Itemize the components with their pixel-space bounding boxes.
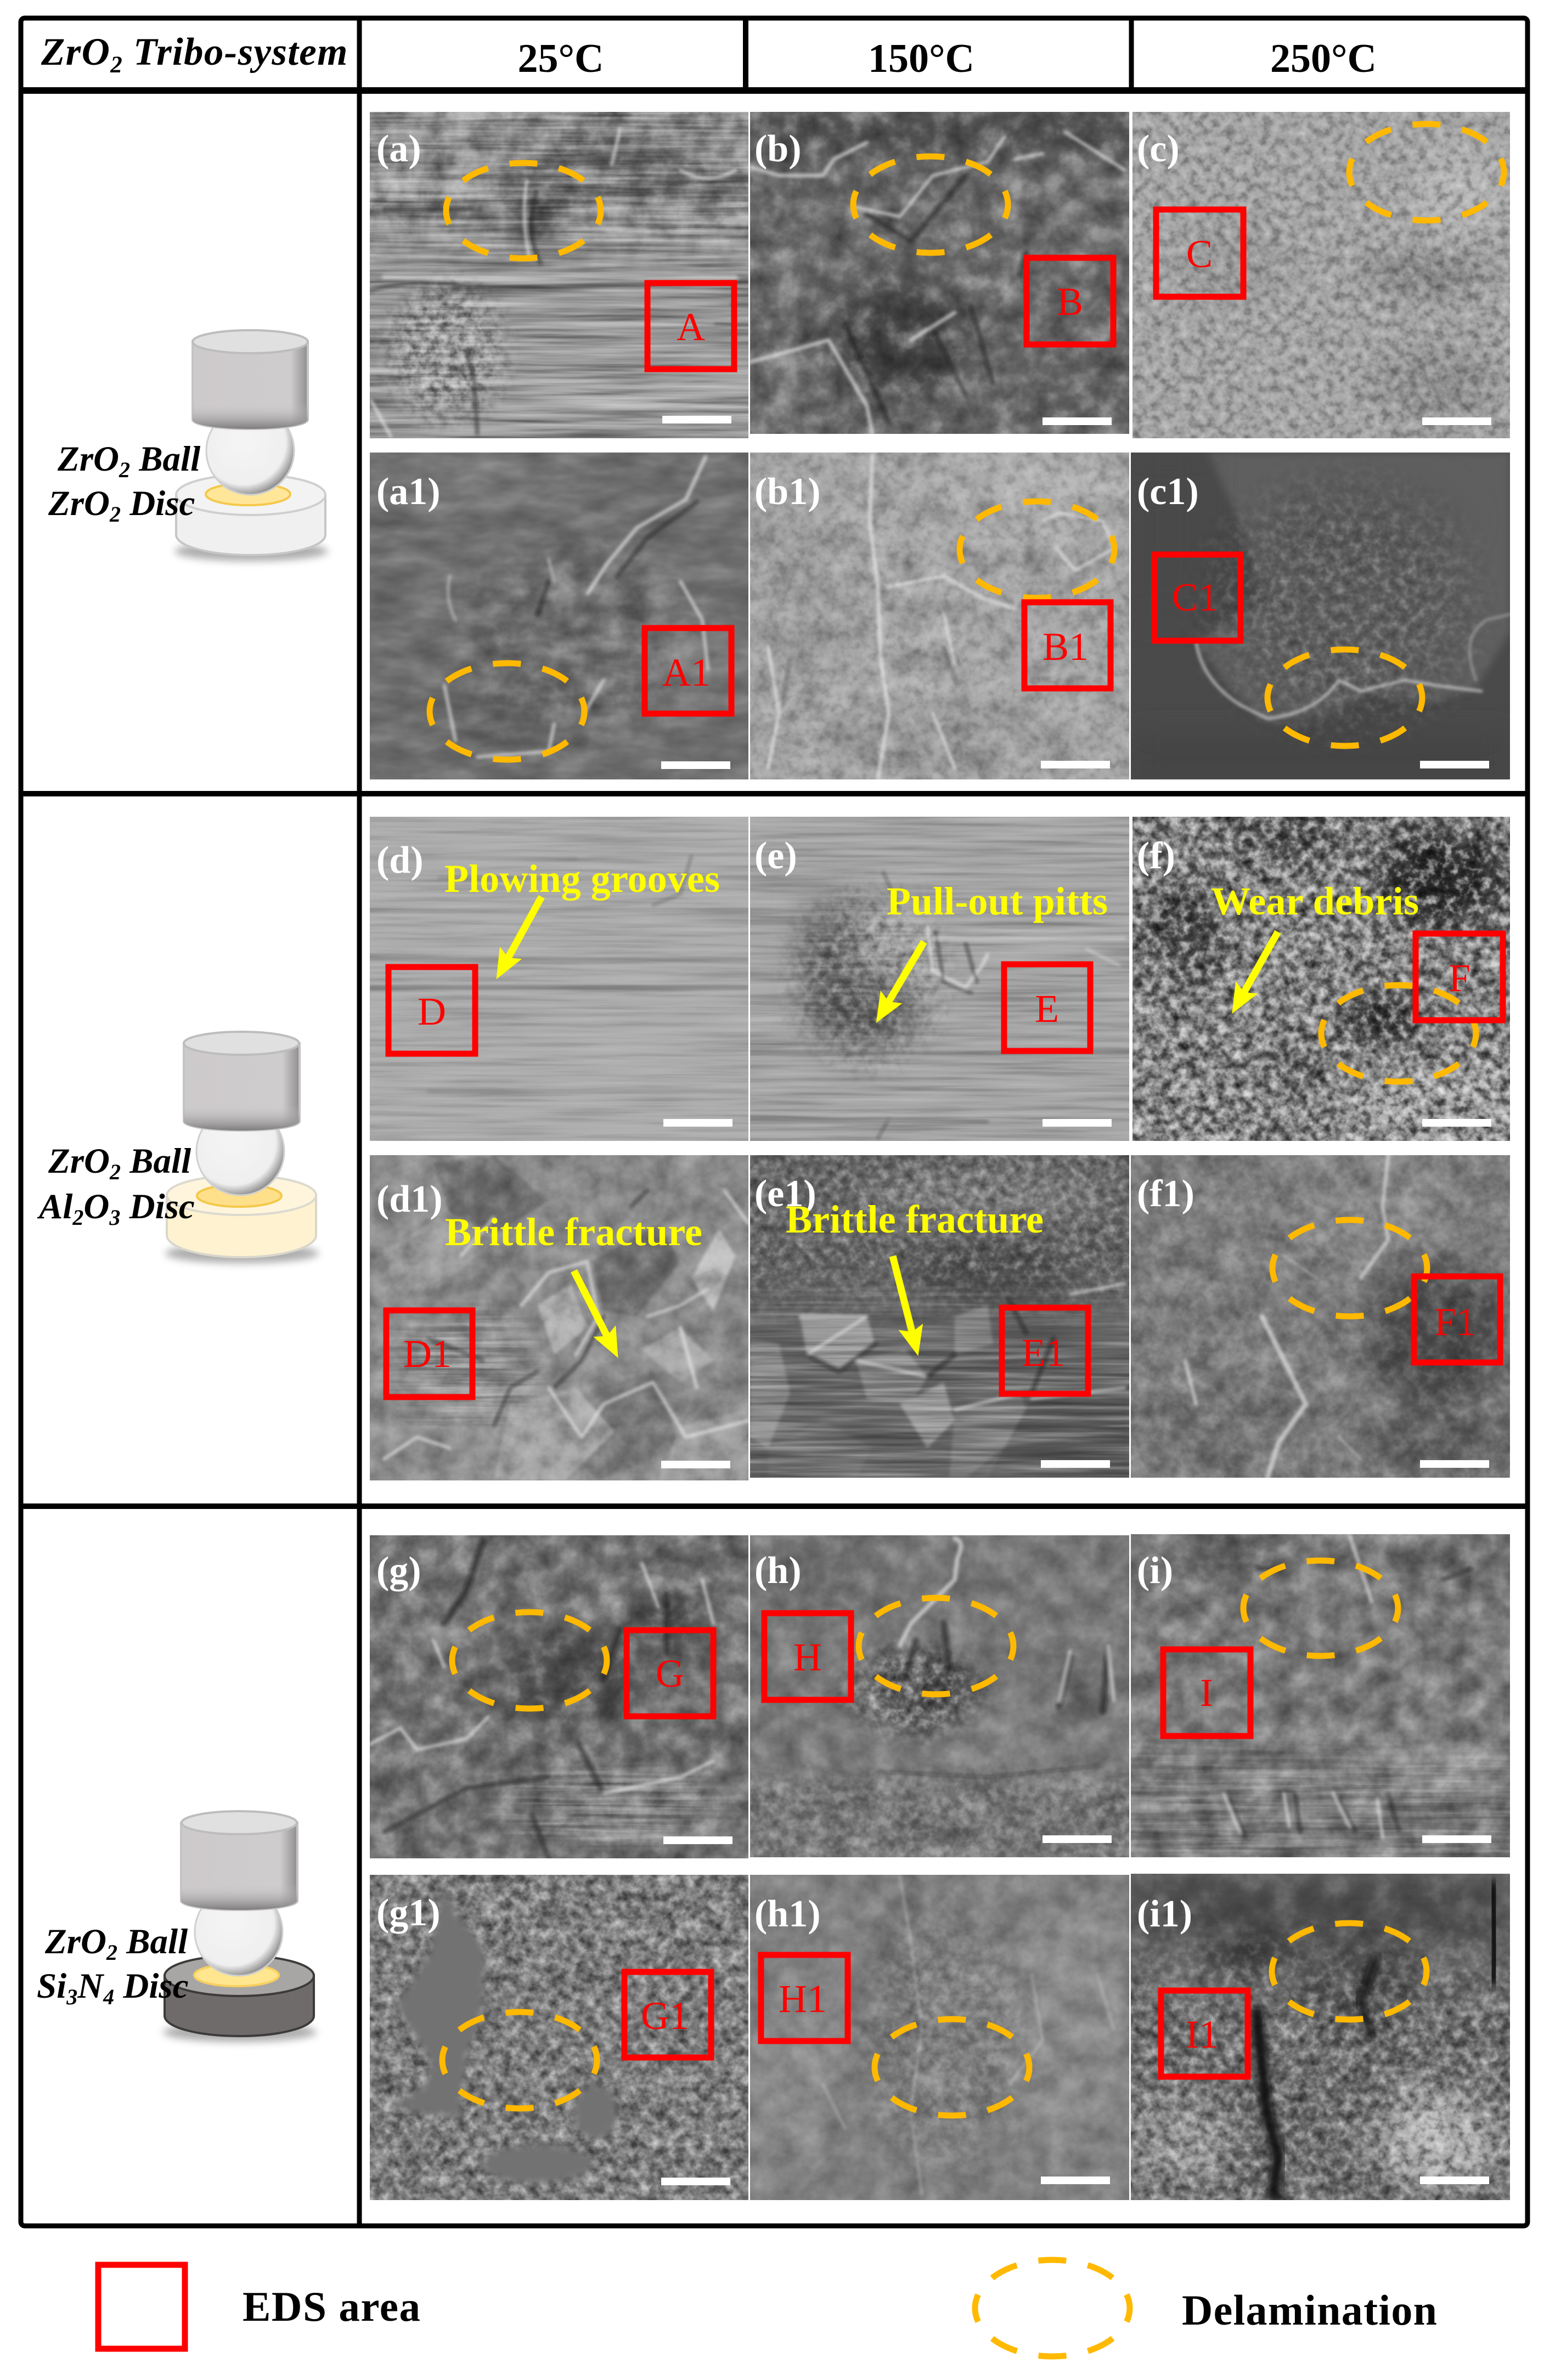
EDS box C1 bbox=[1154, 555, 1241, 641]
header: 250°C: 250°C bbox=[1270, 36, 1377, 81]
scale bar bbox=[1420, 1460, 1489, 1468]
EDS box G bbox=[627, 1630, 713, 1716]
label: ZrO2 Ball / Si3N4 Disc: N bbox=[77, 1966, 104, 2006]
label (c): (c) bbox=[1137, 128, 1180, 170]
EDS box A1 bbox=[645, 628, 731, 714]
panel: SEM (h) bbox=[750, 1535, 1129, 1857]
label (a1): (a1) bbox=[376, 471, 441, 513]
label (d1): (d1) bbox=[376, 1178, 443, 1220]
callout: Wear debris: Wear debris bbox=[1211, 879, 1419, 923]
scale bar bbox=[1043, 1119, 1112, 1127]
delamination ellipse bbox=[1267, 649, 1422, 746]
delamination ellipse bbox=[1321, 985, 1476, 1082]
scale bar bbox=[1422, 1835, 1491, 1843]
panel: SEM (g) bbox=[370, 1535, 748, 1858]
panel: SEM (f1) bbox=[1131, 1155, 1514, 1481]
callout: Brittle fracture: Brittle fracture bbox=[445, 1210, 702, 1254]
arrow: Brittle fracture bbox=[893, 1256, 914, 1340]
EDS box I bbox=[1163, 1649, 1250, 1736]
EDS box C bbox=[1156, 210, 1243, 297]
header: system title: Tribo-system bbox=[123, 31, 348, 74]
label (f): (f) bbox=[1137, 835, 1175, 877]
panel: SEM (b) bbox=[746, 112, 1130, 434]
label (i1): (i1) bbox=[1137, 1893, 1192, 1935]
scale bar bbox=[663, 1119, 732, 1127]
scale bar bbox=[663, 1836, 732, 1844]
box letter I: I bbox=[1200, 1671, 1213, 1715]
label (f1): (f1) bbox=[1137, 1173, 1194, 1215]
label: ZrO2 Ball / Al2O3 Disc: Al bbox=[39, 1187, 72, 1226]
box letter F1: F1 bbox=[1434, 1300, 1476, 1344]
label: ZrO2 Ball / Al2O3 Disc bbox=[37, 1141, 195, 1230]
label (b1): (b1) bbox=[754, 471, 821, 513]
panel: SEM (a) bbox=[370, 112, 763, 438]
scale bar bbox=[1043, 417, 1112, 425]
delamination ellipse bbox=[875, 2019, 1029, 2116]
EDS box B1 bbox=[1024, 602, 1111, 688]
delamination ellipse bbox=[430, 663, 584, 760]
EDS box E1 bbox=[1002, 1308, 1088, 1394]
panel: SEM (d1) bbox=[370, 1155, 748, 1480]
delamination ellipse bbox=[452, 1612, 607, 1709]
label: ZrO2 Ball / ZrO2 Disc: ZrO bbox=[58, 439, 119, 479]
box letter I1: I1 bbox=[1186, 2012, 1219, 2056]
arrow: Plowing grooves bbox=[504, 897, 542, 965]
label (g1): (g1) bbox=[376, 1892, 441, 1934]
panel: SEM (e1) bbox=[750, 1155, 1129, 1478]
scale bar bbox=[1041, 2177, 1110, 2184]
box letter H: H bbox=[793, 1635, 822, 1679]
EDS box E bbox=[1004, 964, 1090, 1051]
delamination ellipse bbox=[446, 163, 601, 258]
EDS box D bbox=[388, 967, 475, 1054]
panel: SEM (c) bbox=[1132, 112, 1510, 438]
label: ZrO2 Ball / Si3N4 Disc: Si bbox=[37, 1966, 66, 2006]
label: ZrO2 Ball / Si3N4 Disc: Disc bbox=[114, 1966, 189, 2006]
label (h1): (h1) bbox=[754, 1893, 821, 1935]
label: ZrO2 Ball / Al2O3 Disc: Disc bbox=[120, 1187, 195, 1226]
delamination ellipse bbox=[1272, 1220, 1427, 1316]
header: system title: ZrO bbox=[41, 31, 110, 74]
EDS box A bbox=[647, 283, 734, 369]
panel: SEM (a1) bbox=[368, 453, 748, 779]
box letter G1: G1 bbox=[641, 1994, 689, 2038]
box letter E: E bbox=[1035, 987, 1059, 1031]
legend: Delamination: Delamination bbox=[1182, 2286, 1437, 2334]
label: ZrO2 Ball / ZrO2 Disc bbox=[48, 439, 200, 527]
EDS box F bbox=[1416, 934, 1503, 1020]
label: ZrO2 Ball / Si3N4 Disc: 2 bbox=[106, 1940, 117, 1965]
delamination ellipse bbox=[442, 2012, 597, 2108]
EDS box H bbox=[764, 1613, 851, 1700]
panel: SEM (g1) bbox=[370, 1875, 748, 2200]
delamination ellipse bbox=[1243, 1561, 1398, 1656]
arrow: Brittle fracture bbox=[574, 1271, 611, 1343]
panel: SEM (i1) bbox=[1130, 1874, 1510, 2200]
scale bar bbox=[1420, 2177, 1489, 2184]
label: ZrO2 Ball / Al2O3 Disc: Ball bbox=[121, 1141, 191, 1181]
diagram: ZrO2 ball on ZrO2 disc bbox=[174, 330, 328, 561]
header: 150°C: 150°C bbox=[868, 36, 974, 81]
EDS box I1 bbox=[1161, 1991, 1248, 2077]
label (c1): (c1) bbox=[1137, 471, 1199, 513]
label: ZrO2 Ball / ZrO2 Disc: Ball bbox=[130, 439, 200, 479]
label: ZrO2 Ball / Si3N4 Disc bbox=[37, 1922, 189, 2009]
scale bar bbox=[661, 761, 730, 769]
panel: SEM (b1) bbox=[750, 453, 1129, 779]
delamination ellipse bbox=[859, 1598, 1013, 1694]
label: ZrO2 Ball / Al2O3 Disc: 3 bbox=[109, 1205, 120, 1230]
label (h): (h) bbox=[754, 1550, 802, 1592]
box letter C: C bbox=[1186, 232, 1213, 276]
legend: Delamination bbox=[975, 2260, 1437, 2356]
label: ZrO2 Ball / ZrO2 Disc: 2 bbox=[119, 457, 130, 482]
EDS box B bbox=[1027, 258, 1113, 344]
box letter B1: B1 bbox=[1043, 625, 1089, 669]
EDS box F1 bbox=[1414, 1276, 1500, 1363]
scale bar bbox=[662, 416, 731, 423]
scale bar bbox=[1422, 417, 1491, 425]
callout: Brittle fracture: Brittle fracture bbox=[786, 1197, 1044, 1241]
label: ZrO2 Ball / Si3N4 Disc: 3 bbox=[66, 1985, 77, 2009]
scale bar bbox=[661, 2178, 730, 2185]
arrow: Pull-out pitts bbox=[884, 942, 924, 1009]
box letter A: A bbox=[677, 305, 705, 349]
header: 25°C: 25°C bbox=[517, 36, 604, 81]
panel: SEM (f) bbox=[1132, 817, 1514, 1141]
label: ZrO2 Ball / ZrO2 Disc: 2 bbox=[109, 502, 121, 527]
scale bar bbox=[1041, 1460, 1110, 1468]
panel: SEM (e) bbox=[750, 817, 1129, 1141]
delamination ellipse bbox=[853, 156, 1008, 253]
label: ZrO2 Ball / Al2O3 Disc: ZrO bbox=[48, 1141, 110, 1181]
arrow: Wear debris bbox=[1240, 932, 1278, 999]
legend: EDS area: EDS area bbox=[243, 2283, 420, 2330]
label (a): (a) bbox=[376, 128, 421, 170]
panel: SEM (h1) bbox=[750, 1875, 1130, 2200]
box letter B: B bbox=[1057, 280, 1083, 324]
box letter G: G bbox=[656, 1652, 684, 1695]
delamination ellipse bbox=[1349, 124, 1504, 221]
box letter C1: C1 bbox=[1172, 575, 1218, 619]
scale bar bbox=[1422, 1119, 1491, 1127]
callout: Pull-out pitts: Pull-out pitts bbox=[887, 879, 1108, 923]
label: ZrO2 Ball / ZrO2 Disc: Disc bbox=[121, 484, 195, 523]
label: ZrO2 Ball / Si3N4 Disc: Ball bbox=[117, 1922, 188, 1961]
label: ZrO2 Ball / Al2O3 Disc: O bbox=[83, 1187, 109, 1226]
box letter A1: A1 bbox=[662, 651, 711, 694]
box letter D: D bbox=[418, 990, 446, 1033]
EDS box G1 bbox=[624, 1972, 711, 2057]
diagram: ZrO2 ball on Si3N4 disc bbox=[163, 1811, 317, 2042]
scale bar bbox=[1043, 1835, 1112, 1843]
label (b): (b) bbox=[754, 128, 802, 170]
label: ZrO2 Ball / Si3N4 Disc: ZrO bbox=[45, 1922, 106, 1961]
callout: Plowing grooves: Plowing grooves bbox=[444, 857, 720, 901]
scale bar bbox=[1041, 761, 1110, 768]
scale bar bbox=[1420, 761, 1489, 768]
label (e): (e) bbox=[754, 835, 797, 877]
box letter F: F bbox=[1449, 956, 1470, 1000]
box letter E1: E1 bbox=[1022, 1331, 1066, 1375]
scale bar bbox=[661, 1461, 730, 1468]
label (i): (i) bbox=[1137, 1550, 1173, 1592]
delamination ellipse bbox=[1272, 1923, 1427, 2020]
label (e1): (e1) bbox=[754, 1173, 816, 1215]
box letter D1: D1 bbox=[403, 1332, 452, 1376]
header: system title: 2 bbox=[110, 52, 123, 78]
delamination ellipse bbox=[960, 501, 1114, 598]
label: ZrO2 Ball / Si3N4 Disc: 4 bbox=[103, 1985, 114, 2009]
panel: SEM (i) bbox=[1131, 1534, 1510, 1857]
label: ZrO2 Ball / Al2O3 Disc: 2 bbox=[72, 1205, 83, 1230]
diagram: ZrO2 ball on Al2O3 disc bbox=[165, 1032, 319, 1263]
panel: SEM (c1) bbox=[1131, 453, 1510, 779]
legend: EDS area bbox=[98, 2265, 420, 2349]
label: ZrO2 Ball / Al2O3 Disc: 2 bbox=[109, 1160, 121, 1184]
panel: SEM (d) bbox=[370, 817, 748, 1141]
label (g): (g) bbox=[376, 1550, 421, 1592]
EDS box D1 bbox=[386, 1310, 472, 1397]
box letter H1: H1 bbox=[779, 1977, 827, 2021]
label: ZrO2 Ball / ZrO2 Disc: ZrO bbox=[48, 484, 110, 523]
EDS box H1 bbox=[761, 1955, 848, 2041]
label (d): (d) bbox=[376, 839, 424, 881]
